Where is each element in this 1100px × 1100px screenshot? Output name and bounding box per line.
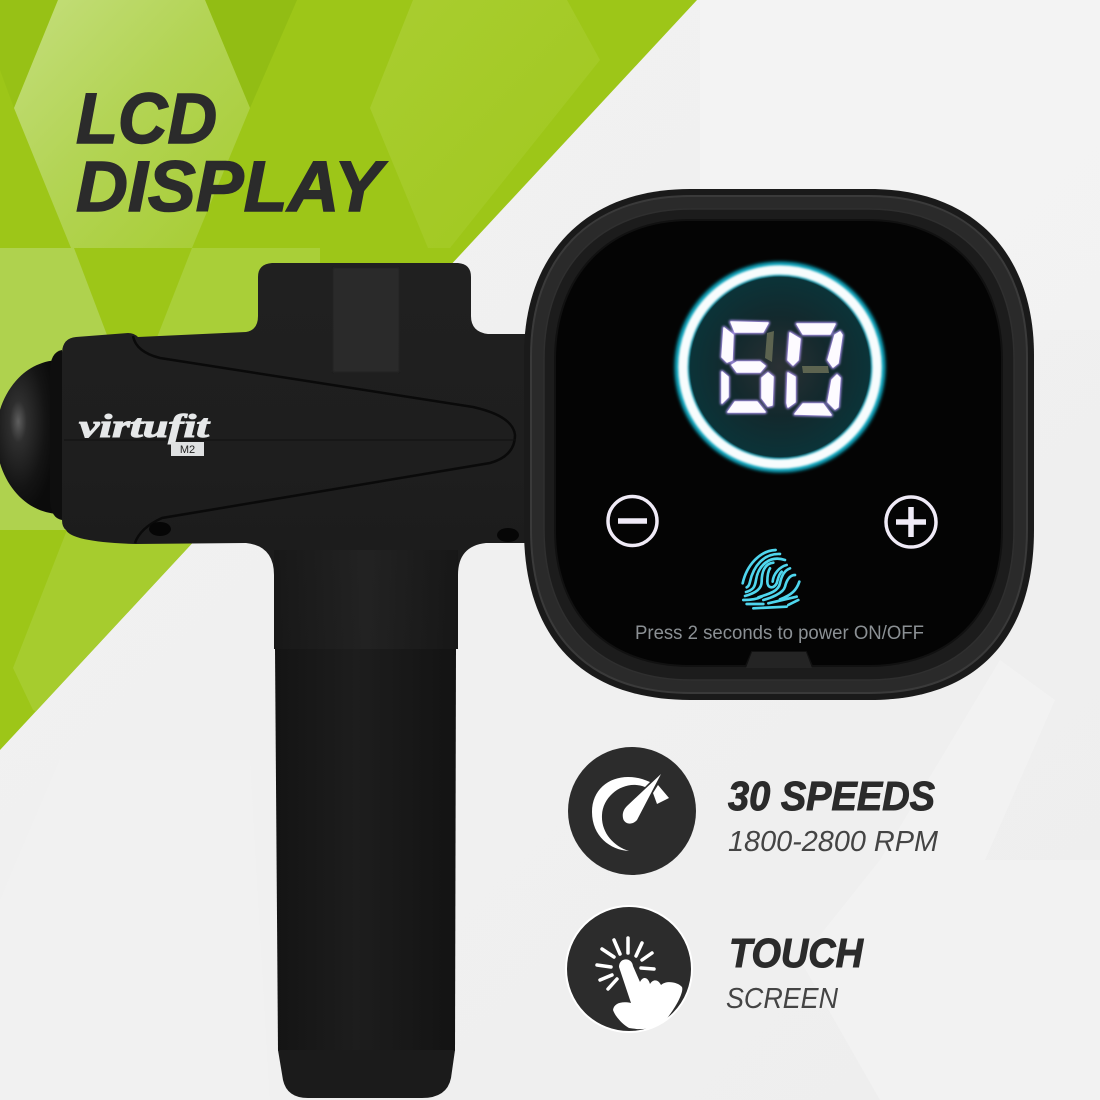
- digit glow: [722, 322, 842, 415]
- title: DISPLAY: [76, 148, 388, 227]
- feature: 30 speeds: [568, 747, 939, 875]
- screen: [555, 220, 1002, 666]
- logo: M2: [180, 444, 195, 456]
- logo: [79, 409, 210, 456]
- logo: virtufit: [79, 409, 210, 445]
- massage gun: [0, 263, 540, 1098]
- screw holes: [149, 522, 519, 542]
- feature text: [726, 930, 864, 1015]
- power instruction: Press 2 seconds to power ON/OFF: [635, 623, 924, 644]
- handle: [275, 649, 456, 1098]
- icon: touch hand: [566, 906, 692, 1032]
- feature text: 1800-2800 RPM: [728, 826, 939, 858]
- body: [62, 263, 540, 649]
- notch: [746, 652, 812, 668]
- speed dial ring: [682, 269, 878, 465]
- display frame: [524, 189, 1034, 700]
- neck shading: [274, 550, 458, 649]
- icon: fingerprint: [743, 550, 799, 608]
- lit segments: [722, 322, 842, 415]
- icon: speedometer: [568, 747, 696, 875]
- icon: minus button: [608, 496, 657, 546]
- feature text: [728, 773, 939, 858]
- ghost segments: [765, 331, 829, 373]
- icon: massage ball head: [0, 350, 62, 520]
- feature: touch screen: [566, 906, 864, 1032]
- digits: 60: [722, 322, 842, 415]
- feature text: TOUCH: [729, 930, 864, 976]
- feature text: 30 SPEEDS: [728, 773, 935, 819]
- title: LCD: [76, 80, 217, 159]
- icon: plus button: [886, 497, 936, 547]
- cap facets: [333, 268, 399, 372]
- title: [76, 80, 388, 227]
- green triangle panel: [0, 0, 700, 750]
- body crease lines: [64, 336, 516, 543]
- LCD display: [524, 189, 1034, 700]
- feature text: SCREEN: [726, 983, 838, 1015]
